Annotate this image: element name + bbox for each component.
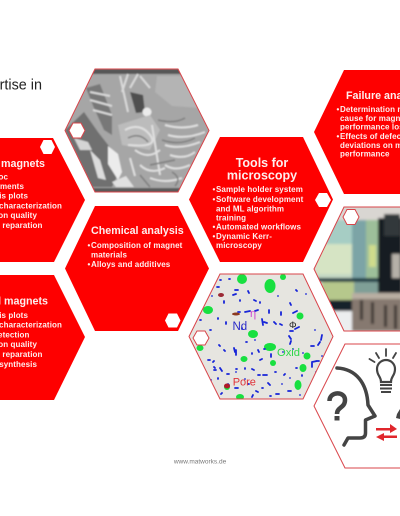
heading: magnets: magnets <box>1 158 45 170</box>
text block: lower magnet list: characterization <box>0 320 62 330</box>
text block: tools bullets: Dynamic Kerr- <box>216 232 272 241</box>
icon: white hexagon marker <box>165 314 180 328</box>
text block: chemical analysis bullets: • <box>88 260 90 269</box>
text block: chemical analysis bullets: Composition of magnet <box>91 241 183 250</box>
text block: failure analysis bullets: • <box>336 105 340 114</box>
text block: upper magnet list: is plots <box>0 192 28 200</box>
text block: tools bullets: Automated workflows <box>216 222 301 232</box>
text block: lower magnet list: synthesis <box>0 360 37 369</box>
text block: upper magnet list: ments <box>0 182 24 191</box>
heading: chemical analysis: Chemical analysis <box>91 225 184 237</box>
icon: white hexagon marker <box>40 140 55 154</box>
text block: chemical analysis bullets: Alloys and additives <box>91 260 171 269</box>
icon: question mark <box>330 393 345 420</box>
text block: lower magnet list: reparation <box>2 350 43 359</box>
text block: tools bullets: • <box>212 222 216 232</box>
text block: tools bullets: • <box>212 195 216 204</box>
panel: failure analysis <box>314 70 400 194</box>
icon: white hexagon marker <box>193 331 209 345</box>
text block: failure analysis bullets <box>336 105 400 158</box>
text block: tools bullets: microscopy <box>216 241 262 250</box>
chart: oxide phase blobs <box>196 274 310 400</box>
text block: tools bullets: • <box>212 185 216 194</box>
footer url: www.matworks.de <box>173 458 227 466</box>
infographic canvas <box>0 68 400 468</box>
panel: tools for microscopy <box>189 137 333 262</box>
icon: white hexagon marker <box>315 193 331 207</box>
text block: lower magnet list: is plots <box>0 311 28 320</box>
label: eta: η <box>250 308 256 320</box>
text block: tools bullets: • <box>212 232 216 241</box>
panel: phase analysis map hexagon <box>185 270 335 402</box>
text block: tools bullets <box>212 185 304 250</box>
text block: tools bullets: Sample holder system <box>216 185 303 194</box>
text block: tools bullets: training <box>216 214 246 222</box>
text block: failure analysis bullets: performance <box>340 150 390 158</box>
icon: light bulb <box>370 349 396 392</box>
icon: white hexagon marker <box>69 123 85 138</box>
icon: second head partial <box>396 409 400 419</box>
chart: pore phase specks <box>224 384 230 388</box>
label: Phi: Φ <box>289 320 297 331</box>
panel: microstructure image hexagon <box>64 68 210 192</box>
text block: upper magnet list <box>0 172 62 230</box>
panel: knowledge and consulting icons hexagon <box>314 344 400 468</box>
title: rtise in <box>0 78 42 94</box>
text block: upper magnet list: characterization <box>0 202 62 210</box>
heading: tools for microscopy: microscopy <box>227 168 297 182</box>
text block: lower magnet list <box>0 311 62 369</box>
text block: upper magnet list: reparation <box>2 221 43 230</box>
chart: neodymium phase specks <box>200 279 326 397</box>
text block: tools bullets: Software development <box>216 195 304 204</box>
panel: laboratory photo hexagon <box>314 206 400 332</box>
icon: head profile <box>337 368 375 445</box>
text block: chemical analysis bullets <box>88 241 183 269</box>
label: Pore: Pore <box>233 377 256 389</box>
text block: failure analysis bullets: • <box>336 132 340 141</box>
panel: permanent magnets upper <box>0 138 85 262</box>
text block: chemical analysis bullets: materials <box>91 250 127 260</box>
icon: white hexagon marker <box>343 210 359 224</box>
text block: tools bullets: and ML algorithm <box>216 204 284 214</box>
text block: chemical analysis bullets: • <box>88 241 90 250</box>
panel: chemical analysis <box>65 206 209 331</box>
panel: permanent magnets lower <box>0 275 85 400</box>
label: Nd: Nd <box>232 321 247 333</box>
label: Oxid: Oxid <box>277 347 300 359</box>
heading: tools for microscopy: Tools for <box>236 156 288 170</box>
icon: red exchange arrows <box>376 424 397 441</box>
